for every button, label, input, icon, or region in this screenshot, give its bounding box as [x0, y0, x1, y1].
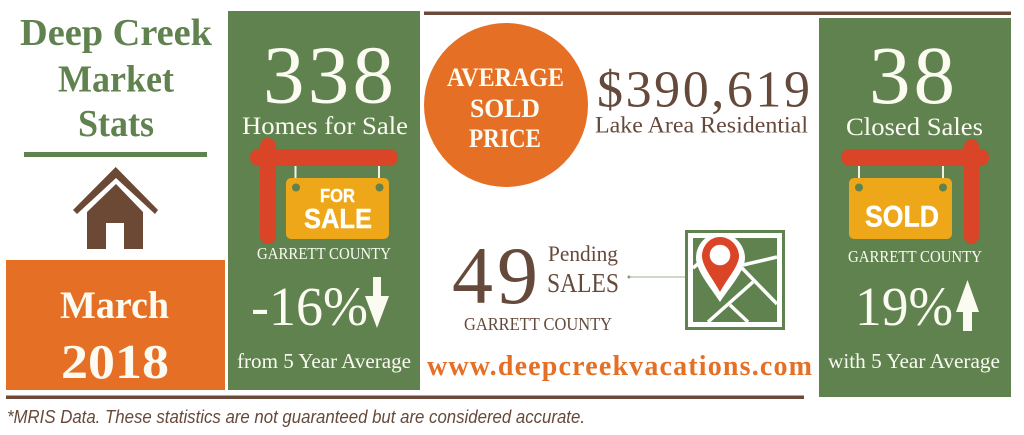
- icon: map with pin: [685, 230, 785, 330]
- icon: for sale sign: SALE: [304, 203, 372, 234]
- callout: average sold price: AVERAGE: [447, 63, 564, 92]
- footnote: *MRIS Data. These statistics are not guaranteed but are considered accurate.: [7, 407, 585, 427]
- comparison label: with 5 Year Average: [828, 349, 1000, 373]
- icon: for sale sign: FOR: [320, 186, 355, 206]
- icon: for sale sign: [250, 138, 398, 244]
- connector line: [628, 276, 685, 278]
- pending sales label: Pending: [548, 241, 618, 266]
- panel: homes for sale: [228, 11, 420, 390]
- icon: sold sign: SOLD: [865, 200, 939, 234]
- callout: average sold price: [424, 23, 588, 187]
- county label: GARRETT COUNTY: [257, 244, 391, 263]
- county label: GARRETT COUNTY: [848, 247, 982, 266]
- pending sales label: [547, 241, 619, 298]
- icon: house: [73, 167, 158, 249]
- icon: sold sign: [841, 139, 989, 244]
- icon: down arrow: [365, 277, 389, 328]
- percent change: 19%: [855, 276, 953, 337]
- pending county label: GARRETT COUNTY: [464, 314, 612, 334]
- callout: average sold price: PRICE: [469, 124, 541, 153]
- panel: date: [6, 260, 225, 390]
- title: Deep Creek: [20, 12, 213, 54]
- pending sales label: SALES: [547, 268, 619, 298]
- title underline: [24, 152, 207, 157]
- title: Market: [58, 58, 174, 100]
- website url: www.deepcreekvacations.com: [427, 351, 812, 382]
- panel: date: March: [60, 284, 169, 327]
- closed sales count: 38: [869, 29, 955, 121]
- comparison label: from 5 Year Average: [237, 349, 411, 373]
- homes for sale label: Homes for Sale: [242, 113, 408, 140]
- title: [20, 12, 213, 145]
- pending sales count: 49: [452, 230, 538, 321]
- homes for sale count: 338: [263, 28, 394, 120]
- callout: average sold price: SOLD: [470, 94, 540, 123]
- panel: date: 2018: [61, 334, 169, 389]
- top divider: [424, 12, 1011, 15]
- percent change: -16%: [251, 276, 368, 337]
- panel: closed sales: [819, 18, 1011, 397]
- closed sales label: Closed Sales: [846, 114, 983, 141]
- icon: up arrow: [956, 280, 979, 331]
- bottom divider: [6, 396, 804, 399]
- title: Stats: [78, 103, 154, 145]
- price label: Lake Area Residential: [595, 112, 808, 138]
- price value: $390,619: [597, 62, 810, 118]
